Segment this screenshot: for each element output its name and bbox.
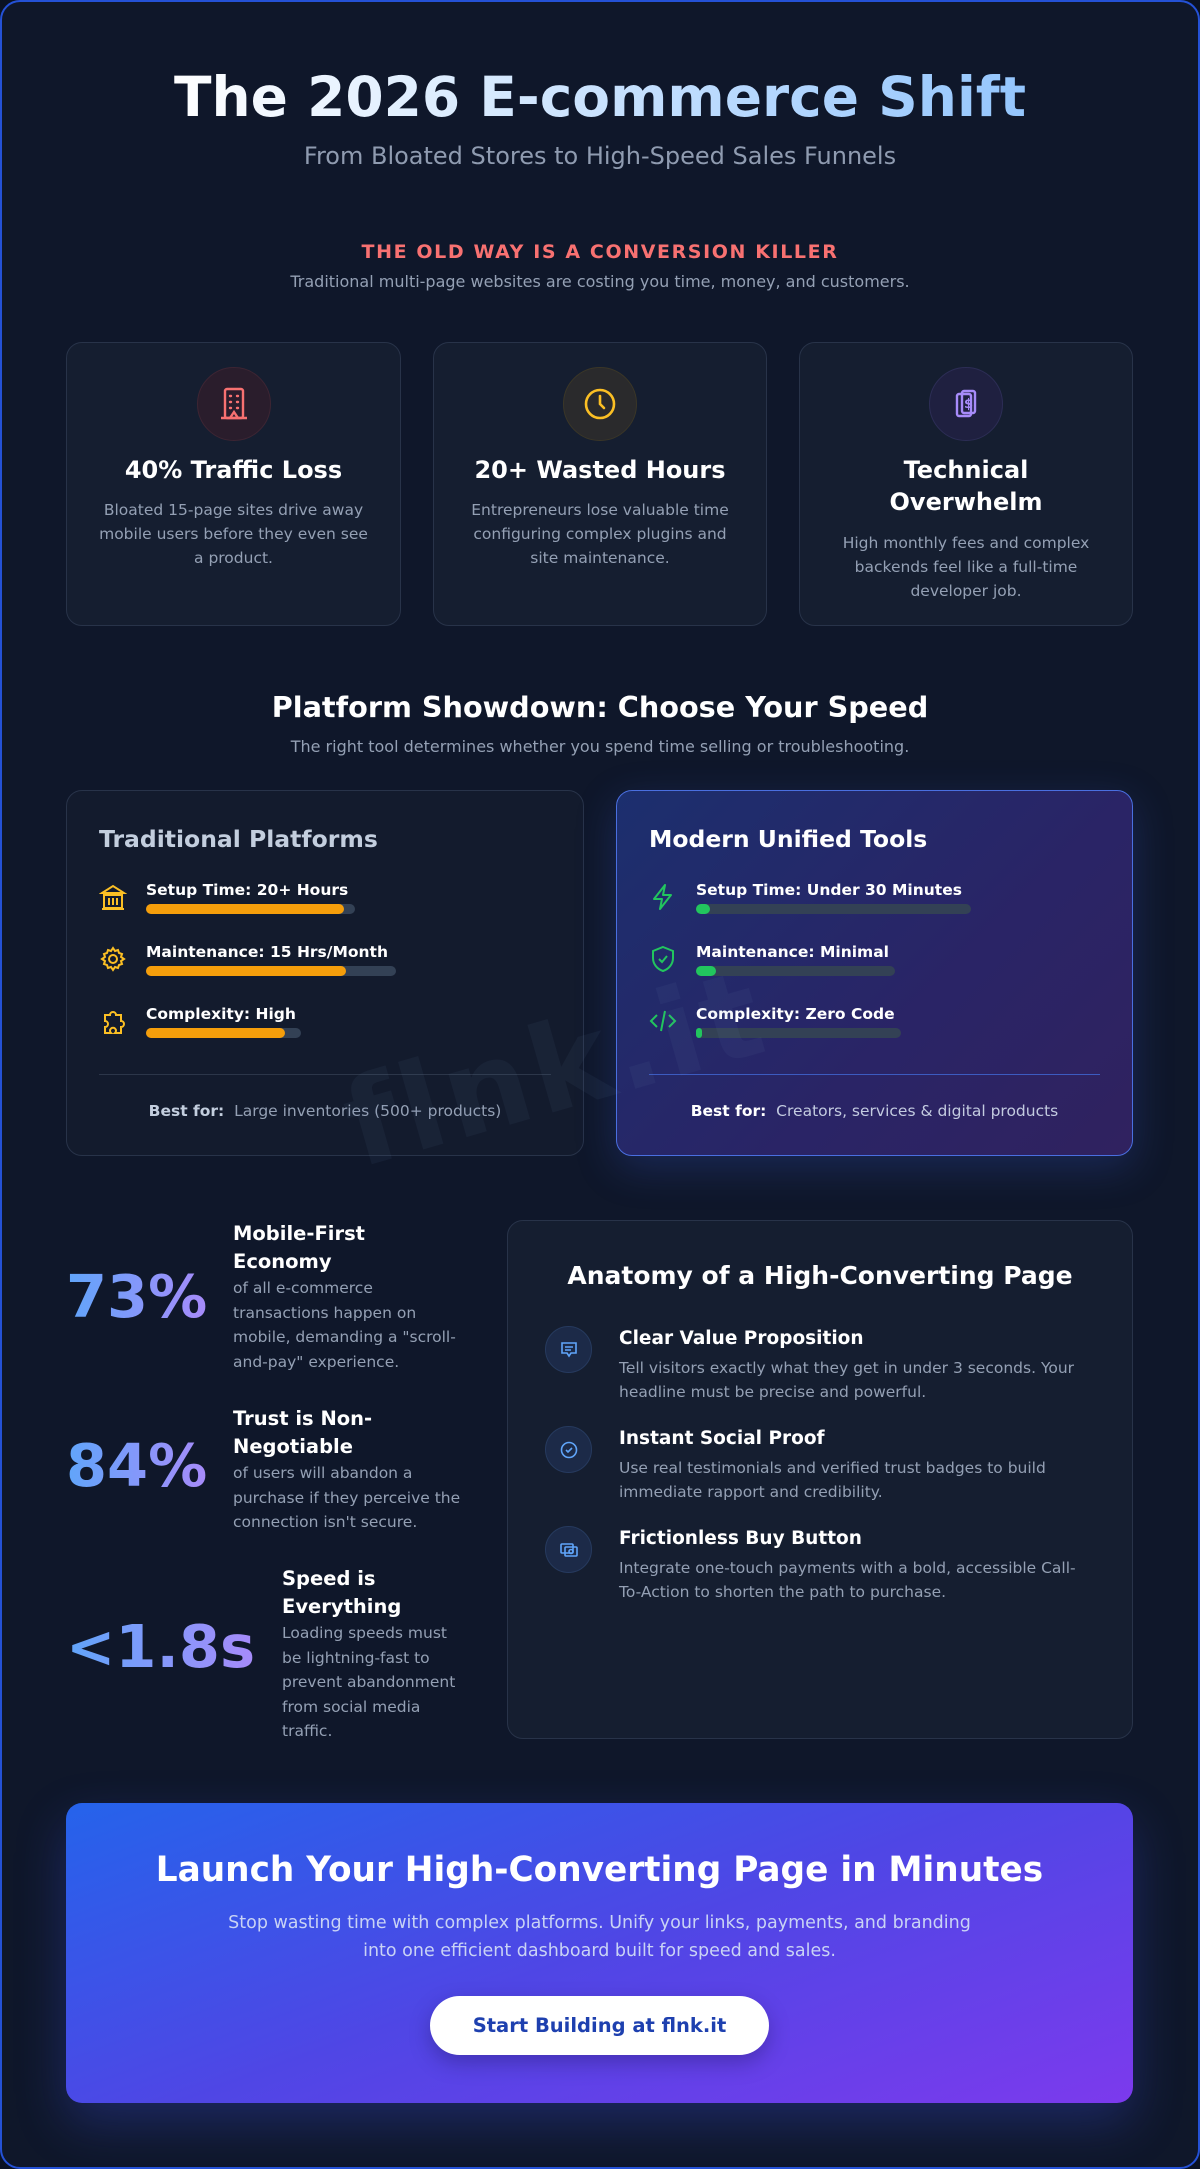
heading: 40% Traffic Loss (125, 456, 342, 484)
best for: Best for: Large inventories (500+ products) (149, 1102, 501, 1120)
title: The 2026 E-commerce Shift (174, 65, 1026, 129)
heading (890, 456, 1042, 516)
stat: 73%: Mobile-First (233, 1222, 365, 1245)
icon: money: $ (964, 397, 973, 412)
stat: 1.8s: Loading speeds must be lightning-fast to prevent abandonment from social media traffic. (282, 1624, 455, 1740)
stat: 73%: 73% (66, 1262, 207, 1331)
item: value proposition: Tell visitors exactly what they get in under 3 seconds. Your headline must be precise and powerful. (619, 1359, 1074, 1401)
stat: 1.8s (66, 1567, 455, 1740)
row: maintenance (100, 943, 396, 976)
row: setup time (653, 881, 971, 914)
panel: traditional platforms (66, 790, 584, 1156)
heading: Modern Unified Tools (649, 825, 927, 853)
best for: Best for: Creators, services & digital products (691, 1102, 1058, 1120)
subtext: The right tool determines whether you spend time selling or troubleshooting. (291, 737, 909, 756)
row: complexity (104, 1005, 301, 1038)
CTA panel (66, 1803, 1133, 2103)
heading: 20+ Wasted Hours (474, 456, 726, 484)
item: value proposition: Clear Value Proposition (619, 1328, 864, 1349)
subtitle: From Bloated Stores to High-Speed Sales Funnels (304, 142, 896, 170)
row: setup time: Setup Time: Under 30 Minutes (696, 881, 962, 899)
panel: technical overwhelm (799, 342, 1133, 626)
stat: 1.8s: Speed is (282, 1567, 376, 1590)
CTA button: Start Building at flnk.it (473, 2014, 726, 2037)
heading: Anatomy of a High-Converting Page (567, 1261, 1073, 1290)
panel: wasted hours (433, 342, 767, 626)
section heading: old way: THE OLD WAY IS A CONVERSION KILLER (362, 241, 838, 263)
item: buy button: Integrate one-touch payments with a bold, accessible Call-To-Action to shorten the path to purchase. (619, 1559, 1076, 1601)
panel: anatomy (507, 1220, 1133, 1739)
CTA text: Stop wasting time with complex platforms. Unify your links, payments, and branding into one efficient dashboard built for speed and sales. (228, 1913, 971, 1961)
row: complexity: Complexity: Zero Code (696, 1005, 895, 1023)
icon: clock (563, 367, 637, 441)
stat: 84%: 84% (66, 1431, 207, 1500)
item: social proof (545, 1426, 1046, 1501)
text: Bloated 15-page sites drive away mobile users before they even see a product. (99, 501, 368, 567)
CTA heading: Launch Your High-Converting Page in Minutes (156, 1850, 1043, 1890)
text: High monthly fees and complex backends feel like a full-time developer job. (843, 534, 1089, 600)
item: value proposition (545, 1326, 1074, 1401)
row: setup time (99, 881, 355, 914)
panel: traffic loss (66, 342, 401, 626)
heading: Technical (904, 456, 1028, 484)
heading: Overwhelm (890, 488, 1042, 516)
stat: 84%: Trust is Non- (233, 1407, 372, 1430)
stat: 84% (66, 1407, 460, 1531)
watermark: flnk.it (329, 943, 781, 1196)
row: setup time: Setup Time: 20+ Hours (146, 881, 348, 899)
row: maintenance (652, 943, 895, 976)
icon: money (929, 367, 1003, 441)
CTA button (430, 1996, 769, 2055)
stat: 73% (66, 1222, 456, 1370)
stat: 84%: of users will abandon a purchase if they perceive the connection isn't secure. (233, 1464, 460, 1531)
stat: 1.8s: Everything (282, 1595, 401, 1618)
text: Entrepreneurs lose valuable time configuring complex plugins and site maintenance. (471, 501, 729, 567)
row: maintenance: Maintenance: Minimal (696, 943, 889, 961)
item: social proof: Use real testimonials and verified trust badges to build immediate rapport and credibility. (619, 1459, 1046, 1501)
row: complexity (650, 1005, 901, 1038)
stat: 84%: Negotiable (233, 1435, 353, 1458)
panel: modern unified tools (616, 790, 1133, 1156)
heading: Traditional Platforms (99, 825, 378, 853)
icon: building (196, 367, 270, 441)
stat: 73%: of all e-commerce transactions happen on mobile, demanding a "scroll-and-pay" experience. (233, 1279, 456, 1370)
row: maintenance: Maintenance: 15 Hrs/Month (146, 943, 388, 961)
item: social proof: Instant Social Proof (619, 1428, 825, 1449)
item: buy button (545, 1526, 1076, 1601)
stat: 1.8s: <1.8s (66, 1612, 255, 1681)
stat: 73%: Economy (233, 1250, 332, 1273)
row: complexity: Complexity: High (146, 1005, 296, 1023)
item: buy button: Frictionless Buy Button (619, 1528, 862, 1549)
section subtext: Traditional multi-page websites are costing you time, money, and customers. (290, 272, 910, 291)
heading: platform showdown: Platform Showdown: Choose Your Speed (272, 690, 928, 724)
